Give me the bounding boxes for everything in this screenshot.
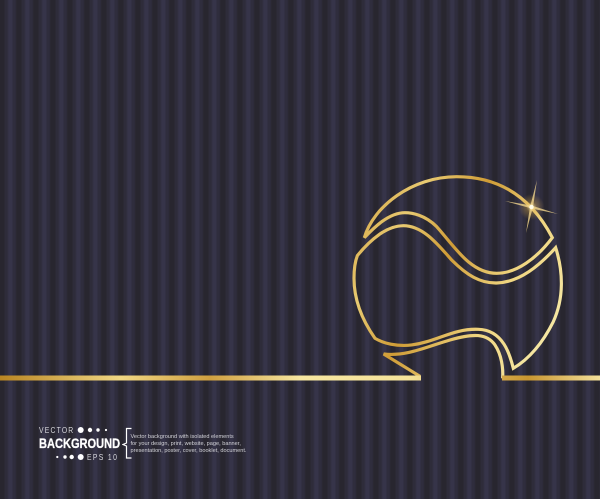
gold horizontal line, right	[502, 376, 600, 380]
description text: presentation, poster, cover, booklet, document.	[130, 448, 246, 454]
dots bottom	[56, 454, 84, 460]
description text: for your design, print, website, page, banner,	[130, 441, 241, 447]
BACKGROUND heading: BACKGROUND	[39, 435, 120, 451]
sparkle	[505, 180, 558, 233]
EPS 10 label: EPS 10	[87, 452, 118, 462]
bracket	[122, 428, 132, 459]
logo block	[39, 425, 246, 462]
VECTOR label: VECTOR	[39, 425, 74, 435]
ball bottom tail	[384, 335, 503, 378]
ball upper segment	[364, 177, 552, 273]
dots top	[78, 427, 108, 433]
description text	[130, 434, 246, 454]
description text: Vector background with isolated elements	[130, 434, 234, 440]
gold horizontal line, left	[0, 376, 421, 380]
ball lower segment	[354, 226, 561, 368]
